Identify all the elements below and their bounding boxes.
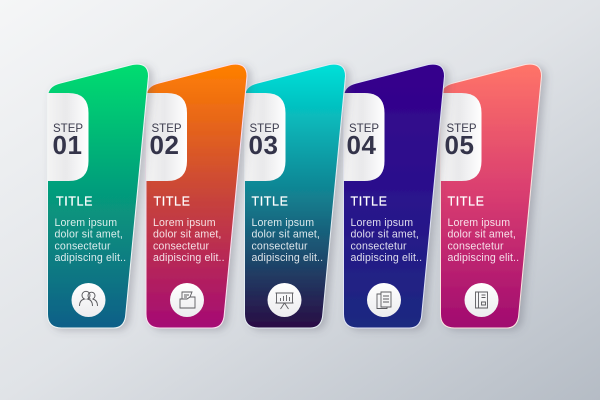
panel: step 4 (344, 64, 444, 328)
panel: step 1 (48, 64, 148, 328)
step tab 2: 02 (150, 130, 179, 160)
icon: documents (367, 283, 401, 317)
step tab 5: 05 (444, 130, 474, 160)
body text 2: adipiscing elit.. (153, 252, 225, 264)
body text 2: consectetur (153, 240, 210, 252)
step tab 5: STEP (446, 123, 477, 135)
step tab 3 (244, 93, 286, 181)
body text 1: adipiscing elit.. (54, 252, 126, 264)
panel: step 2 (146, 64, 247, 328)
body text 3: Lorem ipsum (252, 217, 314, 229)
panel: step 5 (440, 64, 542, 328)
step tab 5 (440, 93, 482, 181)
body text 4: Lorem ipsum (350, 217, 413, 229)
body text 1: dolor sit amet, (54, 229, 123, 241)
body text 4: dolor sit amet, (350, 229, 419, 241)
title 5: TITLE (448, 194, 485, 208)
body text 4: adipiscing elit.. (350, 252, 422, 264)
step tab 4: STEP (349, 123, 379, 135)
icon: people (72, 283, 106, 317)
title 4: TITLE (350, 194, 388, 208)
step tab 4 (344, 93, 384, 181)
body text 1: Lorem ipsum (54, 217, 117, 229)
body text 2: dolor sit amet, (153, 229, 221, 241)
body text 4: consectetur (350, 240, 407, 252)
icon: notebook (464, 283, 498, 317)
body text 1: consectetur (54, 240, 111, 252)
body text 5: dolor sit amet, (448, 229, 516, 241)
step tab 1 (48, 93, 88, 181)
step tab 4: 04 (346, 130, 376, 160)
title 1: TITLE (56, 194, 93, 208)
body text 5: consectetur (448, 240, 504, 252)
body text 2: Lorem ipsum (153, 217, 216, 229)
icon: presentation board (268, 283, 302, 317)
title 3: TITLE (252, 194, 289, 208)
body text 3: consectetur (252, 240, 308, 252)
body text 5: adipiscing elit.. (448, 252, 519, 264)
title 2: TITLE (154, 194, 191, 208)
step tab 2: STEP (152, 123, 182, 135)
icon: folder (170, 283, 204, 317)
step tab 1: STEP (53, 123, 83, 135)
step tab 2 (146, 93, 187, 181)
step tab 3: STEP (250, 123, 280, 135)
body text 5: Lorem ipsum (448, 217, 510, 229)
step tab 3: 03 (248, 130, 278, 160)
step tab 1: 01 (52, 130, 82, 160)
body text 3: dolor sit amet, (252, 229, 320, 241)
body text 3: adipiscing elit.. (252, 252, 323, 264)
panel: step 3 (244, 64, 346, 328)
